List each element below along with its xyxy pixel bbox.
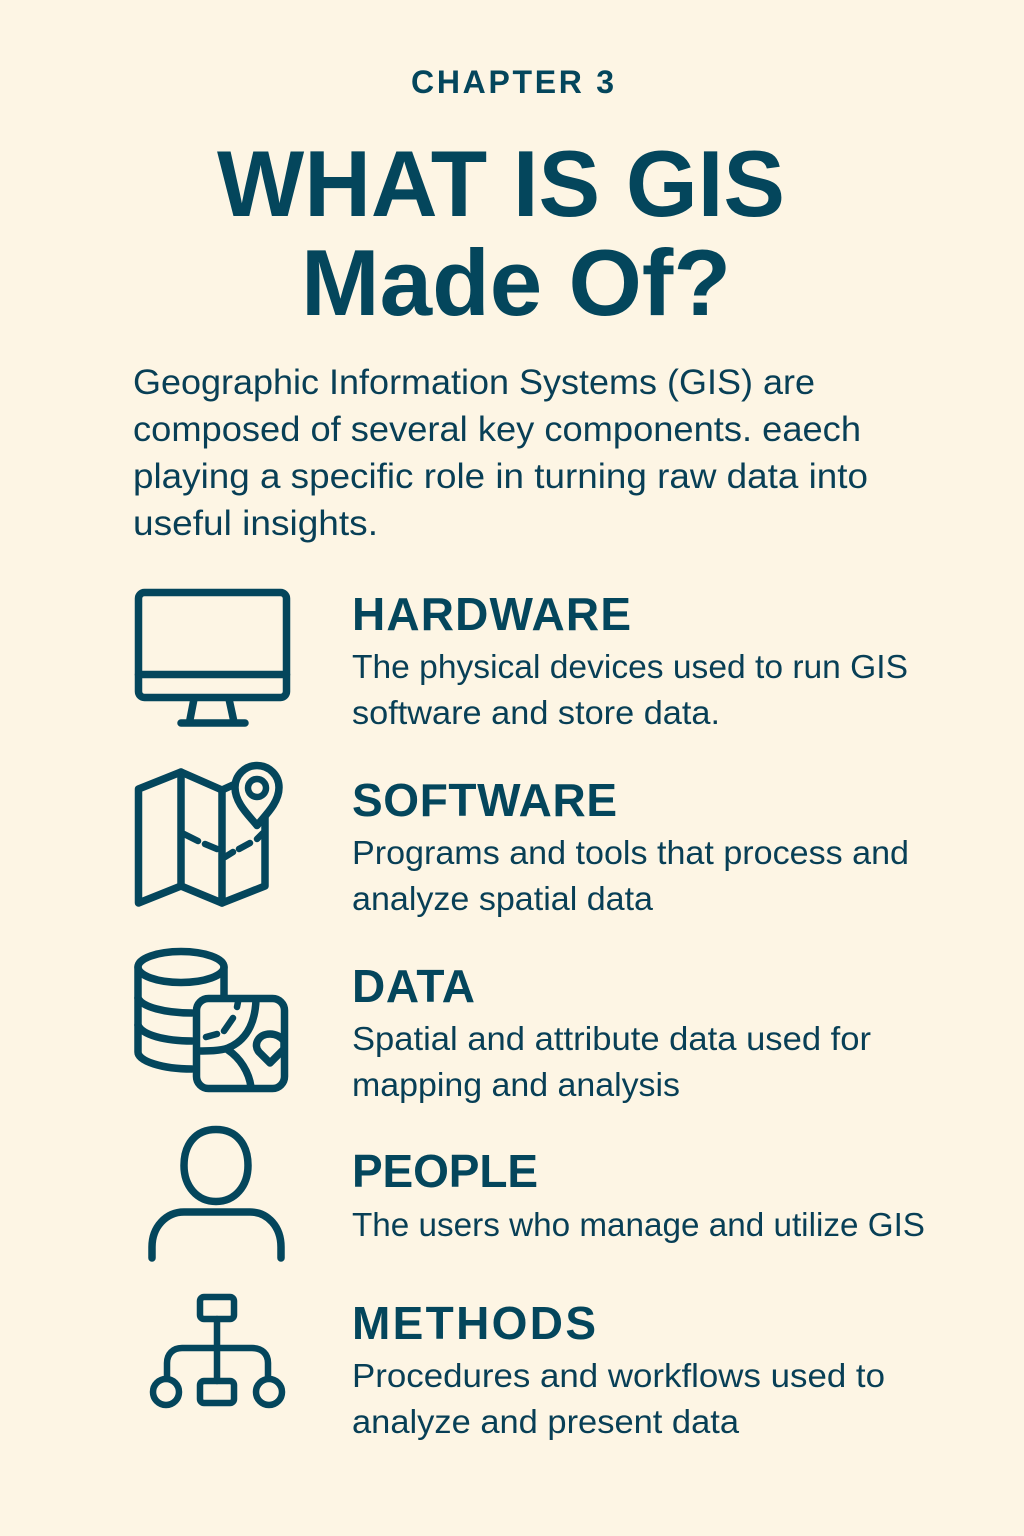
heading: software: SOFTWARE [352,774,617,826]
intro text block: playing a specific role in turning raw data into [133,456,868,496]
heading: people: PEOPLE [352,1145,538,1197]
description: people: The users who manage and utilize GIS [352,1207,925,1244]
heading: hardware: HARDWARE [352,588,631,640]
description: software [352,835,909,918]
eyebrow: chapter label: CHAPTER 3 [411,64,614,100]
title: WHAT IS GIS [217,131,785,236]
icon: person [152,1130,281,1258]
panel: people [152,1130,925,1258]
panel: hardware [138,588,908,732]
intro text block: composed of several key components. eaech [133,409,861,449]
heading: data: DATA [352,960,475,1012]
title [217,131,785,335]
description: data: Spatial and attribute data used for [352,1021,871,1058]
icon: folded map with pin [138,766,279,903]
description: software: Programs and tools that process and [352,835,909,872]
intro text block: Geographic Information Systems (GIS) are [133,362,815,402]
description: data [352,1021,871,1104]
description: hardware [352,649,908,732]
description: methods: Procedures and workflows used to [352,1358,885,1395]
icon: database with map [138,952,284,1088]
description: software: analyze spatial data [352,881,653,918]
panel: methods [153,1297,885,1441]
icon: computer monitor [138,592,286,723]
description: data: mapping and analysis [352,1067,680,1104]
description: methods [352,1358,885,1441]
title: Made Of? [301,230,731,335]
description: methods: analyze and present data [352,1404,739,1441]
intro text block: useful insights. [133,503,378,543]
panel: software [138,766,909,918]
description: hardware: The physical devices used to run GIS [352,649,908,686]
intro text block [133,362,868,543]
description: hardware: software and store data. [352,695,720,732]
panel: data [138,952,871,1104]
heading: methods: METHODS [352,1297,596,1349]
icon: workflow diagram [153,1297,282,1405]
